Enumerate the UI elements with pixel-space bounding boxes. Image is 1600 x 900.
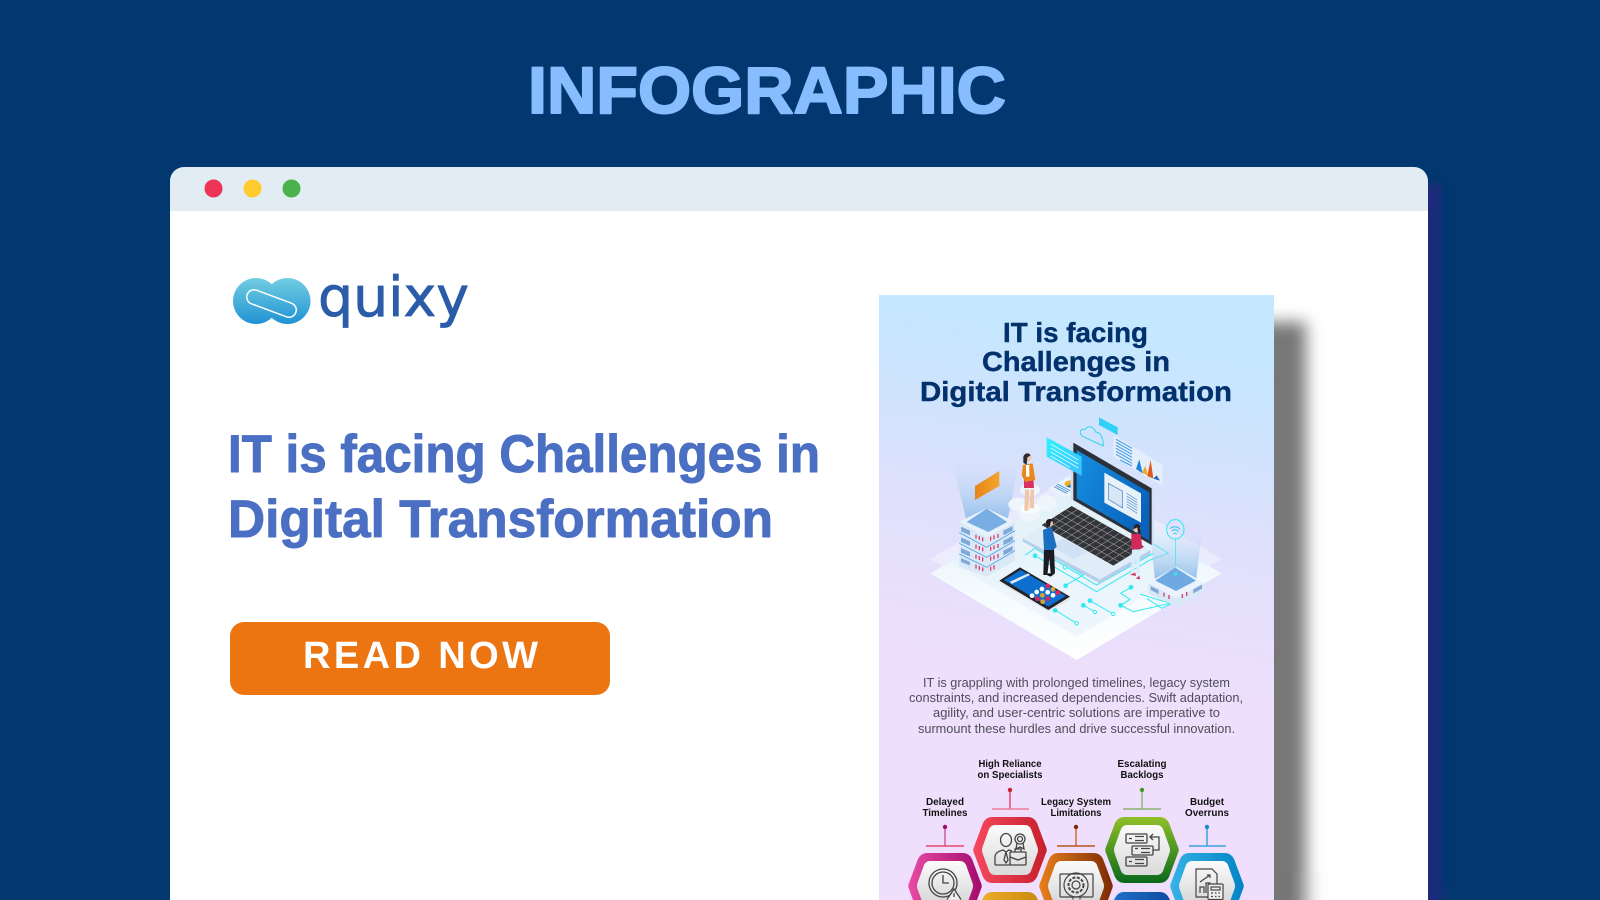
infographic canvas (170, 66, 1444, 900)
left beam (956, 475, 1016, 518)
read now button: READ NOW (303, 635, 538, 677)
floating callout (1047, 437, 1082, 476)
challenge: delayed timelines (908, 797, 982, 900)
label: Limitations (1050, 808, 1102, 819)
connector (926, 825, 964, 846)
logo wordmark: quixy (318, 265, 469, 329)
challenge: escalating backlogs (1105, 759, 1179, 883)
challenge: legacy system limitations (1039, 797, 1113, 900)
poster title: Digital Transformation (920, 376, 1232, 407)
circuit lines (1025, 542, 1175, 625)
infographic poster preview (879, 295, 1274, 900)
page title: INFOGRAPHIC (528, 53, 1006, 127)
poster description: IT is grappling with prolonged timelines, legacy system (923, 675, 1230, 690)
hexagon (1105, 817, 1179, 883)
hexagon (1170, 853, 1244, 900)
poster title: IT is facing (1003, 317, 1148, 348)
laptop (1023, 442, 1154, 583)
partial hexagon: yellow (982, 892, 1038, 900)
small callout (1099, 417, 1118, 435)
label: Overruns (1185, 808, 1229, 819)
document and chart panel (1113, 435, 1163, 486)
right server (1148, 567, 1204, 607)
poster description: agility, and user-centric solutions are imperative to (933, 705, 1220, 720)
main heading: IT is facing Challenges in (228, 425, 820, 484)
partial hexagon: deep blue (1114, 892, 1170, 900)
connector (992, 788, 1029, 809)
label (922, 798, 967, 816)
window title bar (170, 167, 1428, 211)
platform (930, 473, 1222, 660)
hexagon (973, 817, 1047, 883)
man in blue shirt (1043, 519, 1057, 577)
label: Delayed (926, 797, 964, 808)
label: High Reliance (978, 759, 1042, 770)
window control: green dot (282, 180, 300, 198)
main heading (228, 425, 820, 549)
woman with orange jacket (1022, 453, 1035, 511)
label (1185, 797, 1229, 819)
connector (1123, 788, 1161, 809)
right beam and wifi (1149, 520, 1203, 581)
main heading: Digital Transformation (228, 490, 773, 549)
label (978, 759, 1043, 781)
connector (1057, 825, 1095, 846)
cylinders (1008, 484, 1057, 521)
hexagon (1039, 853, 1113, 900)
label: Timelines (922, 808, 968, 819)
label (1042, 798, 1110, 816)
label (1118, 759, 1166, 781)
window body (170, 200, 1428, 900)
woman in pink top (1130, 524, 1142, 579)
browser window (170, 167, 1452, 900)
poster title: Challenges in (982, 346, 1170, 377)
window control: red dot (204, 180, 222, 198)
chart card (1048, 475, 1071, 496)
left server rack (959, 508, 1015, 577)
read now button (230, 622, 610, 695)
challenge: high reliance on specialists (973, 759, 1047, 883)
phone (999, 567, 1070, 612)
quixy logo (233, 265, 469, 329)
envelope (975, 471, 999, 500)
logo mark (233, 278, 310, 324)
label: Budget (1190, 797, 1225, 808)
poster description: constraints, and increased dependencies. Swift adaptation, (909, 690, 1243, 705)
poster description (909, 675, 1243, 736)
window control: yellow dot (244, 180, 262, 198)
poster title (920, 317, 1232, 407)
isometric IT illustration (930, 417, 1222, 660)
connector (1189, 825, 1226, 846)
hexagon (908, 853, 982, 900)
label: Legacy System (1041, 797, 1111, 808)
cloud outline (1080, 427, 1103, 446)
poster shadow (1200, 322, 1340, 900)
label: Escalating (1118, 759, 1166, 770)
poster description: surmount these hurdles and drive successful innovation. (918, 721, 1235, 736)
challenge: budget overruns (1170, 797, 1244, 900)
label: on Specialists (978, 770, 1043, 781)
label: Backlogs (1120, 770, 1164, 781)
